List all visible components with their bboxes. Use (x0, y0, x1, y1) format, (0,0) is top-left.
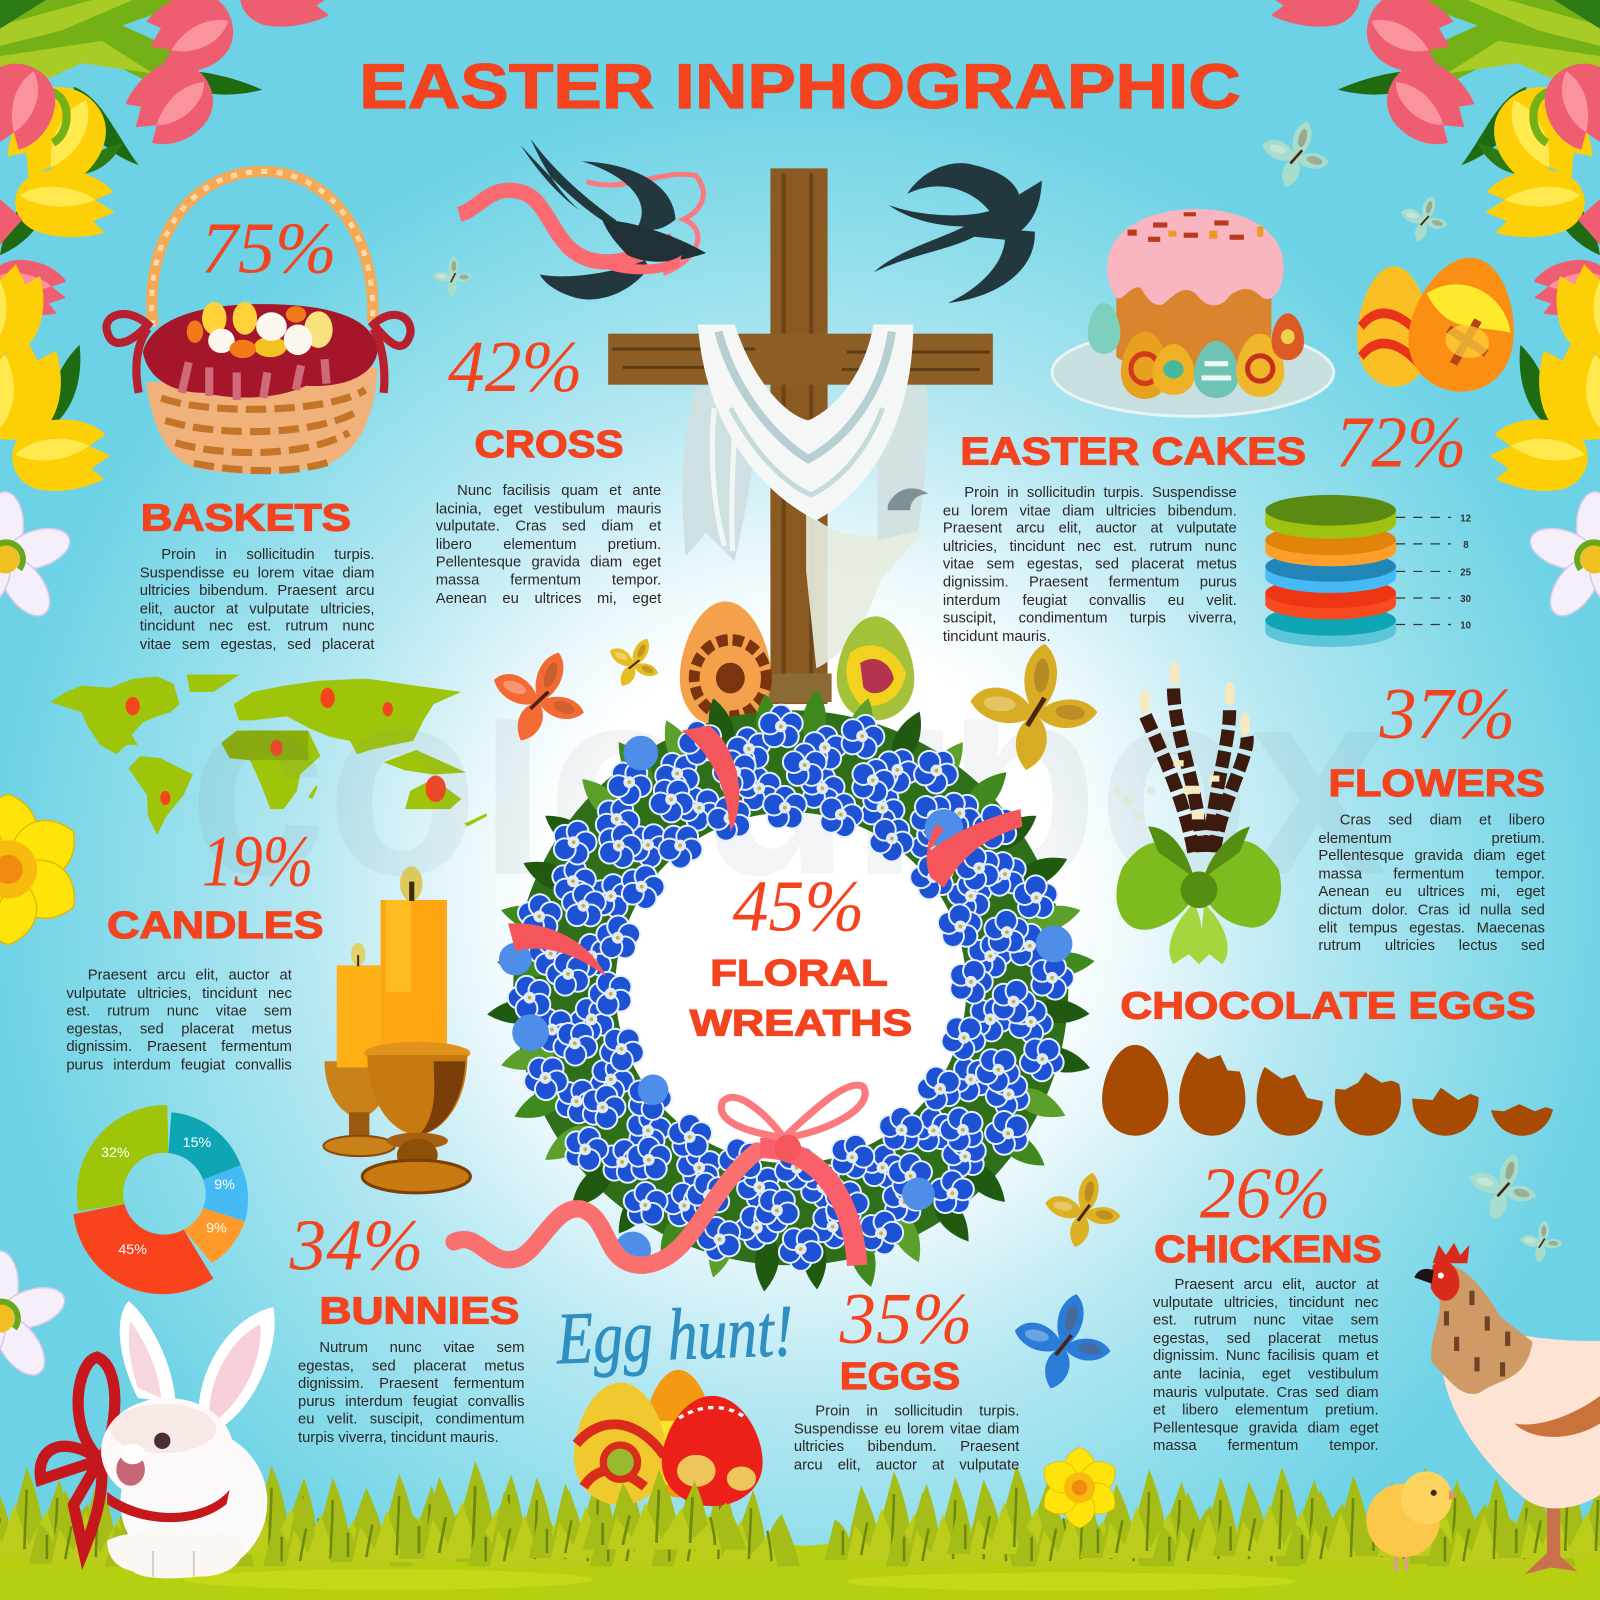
percentage 45%: 45% (733, 866, 864, 947)
icon: chick (1366, 1471, 1457, 1571)
chart: donut: 45% (118, 1242, 147, 1258)
text block flowers: rutrum ultricies lectus sed (1318, 938, 1545, 954)
text block chickens: vulputate ultricies, tincidunt nec (1153, 1294, 1379, 1311)
text block flowers (1318, 812, 1545, 960)
text block baskets (140, 547, 374, 659)
panel: baskets (106, 171, 411, 659)
percentage 75%: 75% (201, 207, 337, 288)
icon: butterfly red (478, 635, 600, 757)
text block easter cakes: suscipit, condimentum turpis viverra, (943, 610, 1237, 627)
text block flowers: elit tempus egestas. Maecenas (1318, 920, 1545, 936)
text block eggs (794, 1403, 1019, 1480)
chart: stacked discs: 25 (1460, 568, 1472, 579)
text block candles: purus interdum feugiat convallis (66, 1057, 292, 1073)
heading chickens: CHICKENS (1154, 1228, 1382, 1270)
text block candles: dignissim. Praesent fermentum (66, 1039, 292, 1055)
text block chickens: est. rutrum nunc vitae sem (1153, 1312, 1379, 1329)
corner flowers: top left (0, 0, 337, 624)
text block bunnies (298, 1340, 524, 1452)
text block baskets: elit, auctor at vulputate ultricies, (140, 601, 374, 617)
icon: egg hunt eggs (574, 1370, 763, 1549)
percentage 42%: 42% (448, 326, 583, 407)
icon: decorated green egg (837, 616, 914, 720)
text block baskets: tincidunt nec est. rutrum nunc (140, 619, 374, 635)
chart: donut: 9% (206, 1221, 227, 1237)
text block eggs: ultricies bibendum. Praesent (794, 1439, 1019, 1455)
chart: stacked discs: 8 (1463, 540, 1469, 551)
text block easter cakes: interdum feugiat convallis eu velit. (943, 592, 1237, 609)
panel: floral wreaths (454, 688, 1096, 1292)
heading easter cakes: EASTER CAKES (960, 430, 1306, 473)
text block candles (66, 967, 292, 1080)
chart: donut (73, 1105, 248, 1294)
chart: stacked discs (1265, 495, 1472, 647)
text block chickens: ante lacinia, eget vestibulum (1153, 1366, 1379, 1383)
percentage 34%: 34% (289, 1204, 423, 1285)
text block baskets: Suspendisse eu lorem vitae diam (140, 565, 374, 581)
heading chocolate eggs: CHOCOLATE EGGS (1120, 984, 1536, 1026)
percentage 35%: 35% (839, 1278, 972, 1359)
text block candles: egestas, sed placerat metus (66, 1021, 292, 1038)
percentage 72%: 72% (1336, 401, 1466, 482)
text block flowers: massa fermentum tempor. (1318, 866, 1545, 882)
text block candles: Praesent arcu elit, auctor at (88, 967, 292, 984)
icon: butterfly teal 1 (1253, 112, 1338, 196)
text block candles: vulputate ultricies, tincidunt nec (66, 985, 292, 1002)
text block bunnies: eu velit. suscipit, condimentum (298, 1412, 524, 1428)
text block cross: Pellentesque gravida diam eget (436, 554, 661, 571)
text block cross: vulputate. Cras sed diam et (436, 519, 661, 535)
text block easter cakes: eu lorem vitae diam ultricies bibendum. (943, 503, 1237, 519)
text block baskets: vitae sem egestas, sed placerat (140, 637, 374, 653)
heading candles: CANDLES (107, 904, 323, 946)
corner flowers: top right (1263, 0, 1600, 624)
icon: decorated orange egg (680, 602, 771, 729)
text block cross: libero elementum pretium. (436, 537, 661, 553)
heading floral: FLORAL (710, 953, 888, 994)
icon: decorated eggs (1357, 249, 1527, 400)
heading baskets: BASKETS (141, 497, 351, 539)
icon: butterfly yellow lower (1039, 1165, 1127, 1254)
text block easter cakes: dignissim. Praesent fermentum purus (943, 574, 1237, 591)
text block easter cakes: Proin in sollicitudin turpis. Suspendisse (964, 485, 1237, 501)
text block easter cakes: vitae sem egestas, sed placerat metus (943, 557, 1237, 573)
icon: ribbon bow and tail (454, 1085, 865, 1265)
world map (50, 674, 487, 835)
title: EASTER INPHOGRAPHIC (359, 52, 1241, 122)
grass foreground (0, 1461, 1600, 1600)
icon row: eaten chocolate eggs (1102, 1045, 1554, 1136)
text block easter cakes: ultricies, tincidunt nec est. rutrum nunc (943, 539, 1237, 555)
text block bunnies: egestas, sed placerat metus (298, 1358, 524, 1374)
text block easter cakes: tincidunt mauris. (943, 628, 1051, 645)
icon: bunny (40, 1301, 275, 1578)
heading flowers: FLOWERS (1329, 762, 1545, 804)
icon: hen (1414, 1243, 1600, 1574)
text block chickens: egestas, sed placerat metus (1153, 1330, 1379, 1347)
panel: flowers (1113, 661, 1545, 964)
text block chickens: et libero elementum pretium. (1153, 1402, 1379, 1419)
text block bunnies: purus interdum feugiat convallis (298, 1394, 524, 1410)
chart: stacked discs: 12 (1460, 513, 1471, 524)
icon: daffodil left (0, 794, 88, 945)
icon: small butterfly (432, 256, 472, 296)
percentage 26%: 26% (1200, 1152, 1331, 1233)
icon: butterfly teal 4 (1518, 1218, 1564, 1264)
text block cross: lacinia, eget vestibulum mauris (436, 501, 661, 517)
icon: swallow with ribbon (459, 139, 706, 299)
text block chickens: Praesent arcu elit, auctor at (1174, 1277, 1379, 1293)
icon: swallow right (873, 163, 1042, 303)
text block flowers: elementum pretium. (1318, 830, 1545, 847)
icon: crocus left (0, 1251, 70, 1384)
text block baskets: Proin in sollicitudin turpis. (161, 547, 374, 563)
heading cross: CROSS (474, 423, 623, 465)
icon: willow bouquet with bow (1113, 661, 1281, 964)
text block flowers: Aenean eu ultrices mi, eget (1318, 884, 1545, 900)
panel: cross (436, 168, 993, 729)
icon: butterfly small yellow (599, 627, 669, 697)
text block chickens: mauris vulputate. Cras sed diam (1153, 1384, 1379, 1401)
text block chickens: massa fermentum tempor. (1153, 1438, 1379, 1454)
panel: easter cakes (943, 209, 1527, 653)
icon: basket (106, 171, 411, 473)
text block easter cakes: Praesent arcu elit, auctor at vulputate (943, 521, 1237, 537)
text block cross: massa fermentum tempor. (436, 572, 661, 589)
icon: candles (323, 866, 470, 1193)
chart: donut: 15% (183, 1135, 212, 1151)
icon: wooden cross (608, 168, 993, 704)
text block flowers: Pellentesque gravida diam eget (1318, 848, 1545, 864)
text block eggs: Suspendisse eu lorem vitae diam (794, 1421, 1019, 1437)
icon: butterfly large yellow (965, 638, 1103, 776)
percentage 19%: 19% (202, 821, 313, 902)
text block cross: Nunc facilisis quam et ante (457, 483, 661, 499)
text block flowers: dictum dolor. Cras id nulla sed (1318, 902, 1545, 918)
panel: chickens (1153, 1152, 1600, 1574)
watermark: colourbox (189, 631, 1389, 930)
text block cross (436, 483, 661, 615)
icon: wreath (486, 688, 1096, 1292)
text block flowers: Cras sed diam et libero (1340, 812, 1545, 829)
panel: bunnies (40, 1204, 524, 1578)
chart: stacked discs: 10 (1460, 621, 1471, 632)
chart: donut: 32% (101, 1145, 130, 1161)
heading bunnies: BUNNIES (319, 1289, 519, 1331)
heading wreaths: WREATHS (690, 1003, 912, 1044)
heading egg hunt: Egg hunt! (555, 1290, 795, 1379)
icon: butterfly blue (1005, 1283, 1120, 1399)
text block eggs: arcu elit, auctor at vulputate (794, 1457, 1019, 1473)
icon: draped cloth (683, 324, 929, 668)
chart: stacked discs: 30 (1460, 594, 1471, 605)
icon: butterfly teal 2 (1395, 189, 1454, 248)
panel: eggs (555, 1278, 1019, 1549)
text block chickens: Pellentesque gravida diam eget (1153, 1420, 1379, 1436)
text block eggs: Proin in sollicitudin turpis. (815, 1403, 1019, 1419)
icon: daffodil lower (1037, 1447, 1122, 1528)
text block cross: Aenean eu ultrices mi, eget (436, 590, 661, 607)
text block candles: est. rutrum nunc vitae sem (66, 1003, 292, 1020)
text block bunnies: dignissim. Praesent fermentum (298, 1376, 524, 1392)
panel: chocolate eggs (1102, 984, 1554, 1136)
text block baskets: ultricies bibendum. Praesent arcu (140, 583, 374, 599)
text block bunnies: Nutrum nunc vitae sem (319, 1340, 524, 1356)
text block chickens (1153, 1277, 1379, 1460)
icon: cake on plate (1052, 209, 1334, 416)
percentage 37%: 37% (1379, 673, 1515, 754)
chart: donut: 9% (214, 1177, 235, 1193)
text block bunnies: turpis viverra, tincidunt mauris. (298, 1430, 499, 1446)
panel: candles (66, 821, 470, 1294)
heading eggs: EGGS (840, 1355, 960, 1397)
text block chickens: dignissim. Nunc facilisis quam et (1153, 1348, 1379, 1365)
text block easter cakes (943, 485, 1237, 653)
icon: butterfly teal 3 (1461, 1144, 1545, 1229)
